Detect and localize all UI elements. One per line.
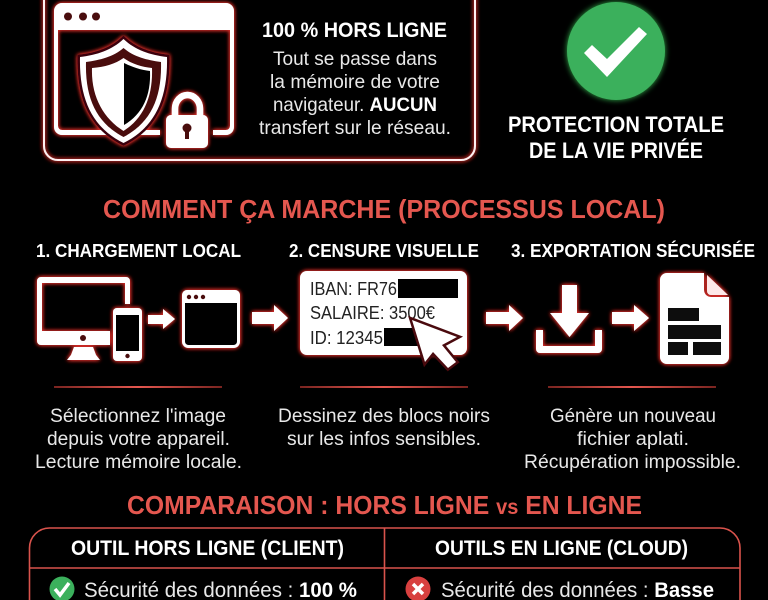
text: protection totale de la vie privée: PROTECTION TOTALE — [508, 112, 724, 137]
text: 100 % hors ligne: Tout se passe dans — [273, 48, 437, 70]
arrow: phone to window — [148, 309, 175, 329]
step 1 description: Lecture mémoire locale. — [35, 452, 242, 473]
arrow: step 1 to step 2 — [252, 305, 288, 331]
step 1 description: Sélectionnez l'image — [50, 406, 226, 427]
icon: green check — [50, 576, 74, 600]
step 2 description — [278, 406, 490, 450]
text: protection totale de la vie privée — [508, 112, 724, 163]
arrow: step 2 to step 3 — [486, 305, 523, 331]
panel border — [44, 0, 475, 160]
comparison table — [30, 528, 740, 600]
text: protection totale de la vie privée: DE LA VIE PRIVÉE — [529, 138, 703, 163]
step 1 description: depuis votre appareil. — [47, 429, 230, 450]
step 2 description: sur les infos sensibles. — [287, 429, 481, 450]
step 3 description: Récupération impossible. — [524, 452, 741, 473]
icon: green check badge — [567, 2, 665, 100]
step 1: chargement local — [35, 240, 242, 473]
heading: comment ça marche: COMMENT ÇA MARCHE (PROCESSUS LOCAL) — [103, 194, 665, 224]
icon: redacted document card — [300, 271, 467, 368]
icon: redacted file — [660, 273, 729, 364]
column header: outil hors ligne: OUTIL HORS LIGNE (CLIENT) — [71, 537, 344, 560]
icon: monitor and phone — [37, 277, 142, 361]
table frame — [30, 528, 740, 600]
step 1 description — [35, 406, 242, 473]
step 2: censure visuelle — [278, 240, 490, 450]
step 3 description — [524, 406, 741, 473]
text: 100 % hors ligne: navigateur. AUCUN — [273, 94, 437, 116]
icon: browser window with shield and lock — [54, 3, 234, 148]
step 2 heading: 2. CENSURE VISUELLE — [289, 240, 479, 261]
icon: redacted document card: IBAN: FR76 — [310, 279, 397, 299]
text: 100 % hors ligne: 100 % HORS LIGNE — [262, 19, 447, 42]
icon: red cross — [406, 576, 430, 600]
step 3: exportation sécurisée — [511, 240, 755, 473]
column header: outils en ligne: OUTILS EN LIGNE (CLOUD) — [435, 537, 688, 560]
arrow: download to file — [612, 305, 649, 331]
step 3 description: Génère un nouveau — [550, 406, 716, 427]
step 2 description: Dessinez des blocs noirs — [278, 406, 490, 427]
text: 100 % hors ligne: la mémoire de votre — [270, 71, 440, 93]
icon: redacted document card: ID: 12345 — [310, 328, 383, 348]
icon: cursor — [412, 320, 457, 368]
text: 100 % hors ligne — [259, 19, 451, 139]
panel: 100 % hors ligne — [44, 0, 475, 160]
heading: comparaison: COMPARAISON : HORS LIGNE vs EN LIGNE — [127, 490, 642, 520]
icon: redacted document card: SALAIRE: 3500€ — [310, 303, 435, 323]
step 3 heading: 3. EXPORTATION SÉCURISÉE — [511, 240, 755, 261]
icon: browser window — [182, 290, 240, 346]
step 1 heading: 1. CHARGEMENT LOCAL — [36, 240, 241, 261]
text: 100 % hors ligne: transfert sur le réseau. — [259, 117, 451, 139]
icon: download — [536, 285, 602, 353]
step 3 description: fichier aplati. — [577, 429, 689, 450]
